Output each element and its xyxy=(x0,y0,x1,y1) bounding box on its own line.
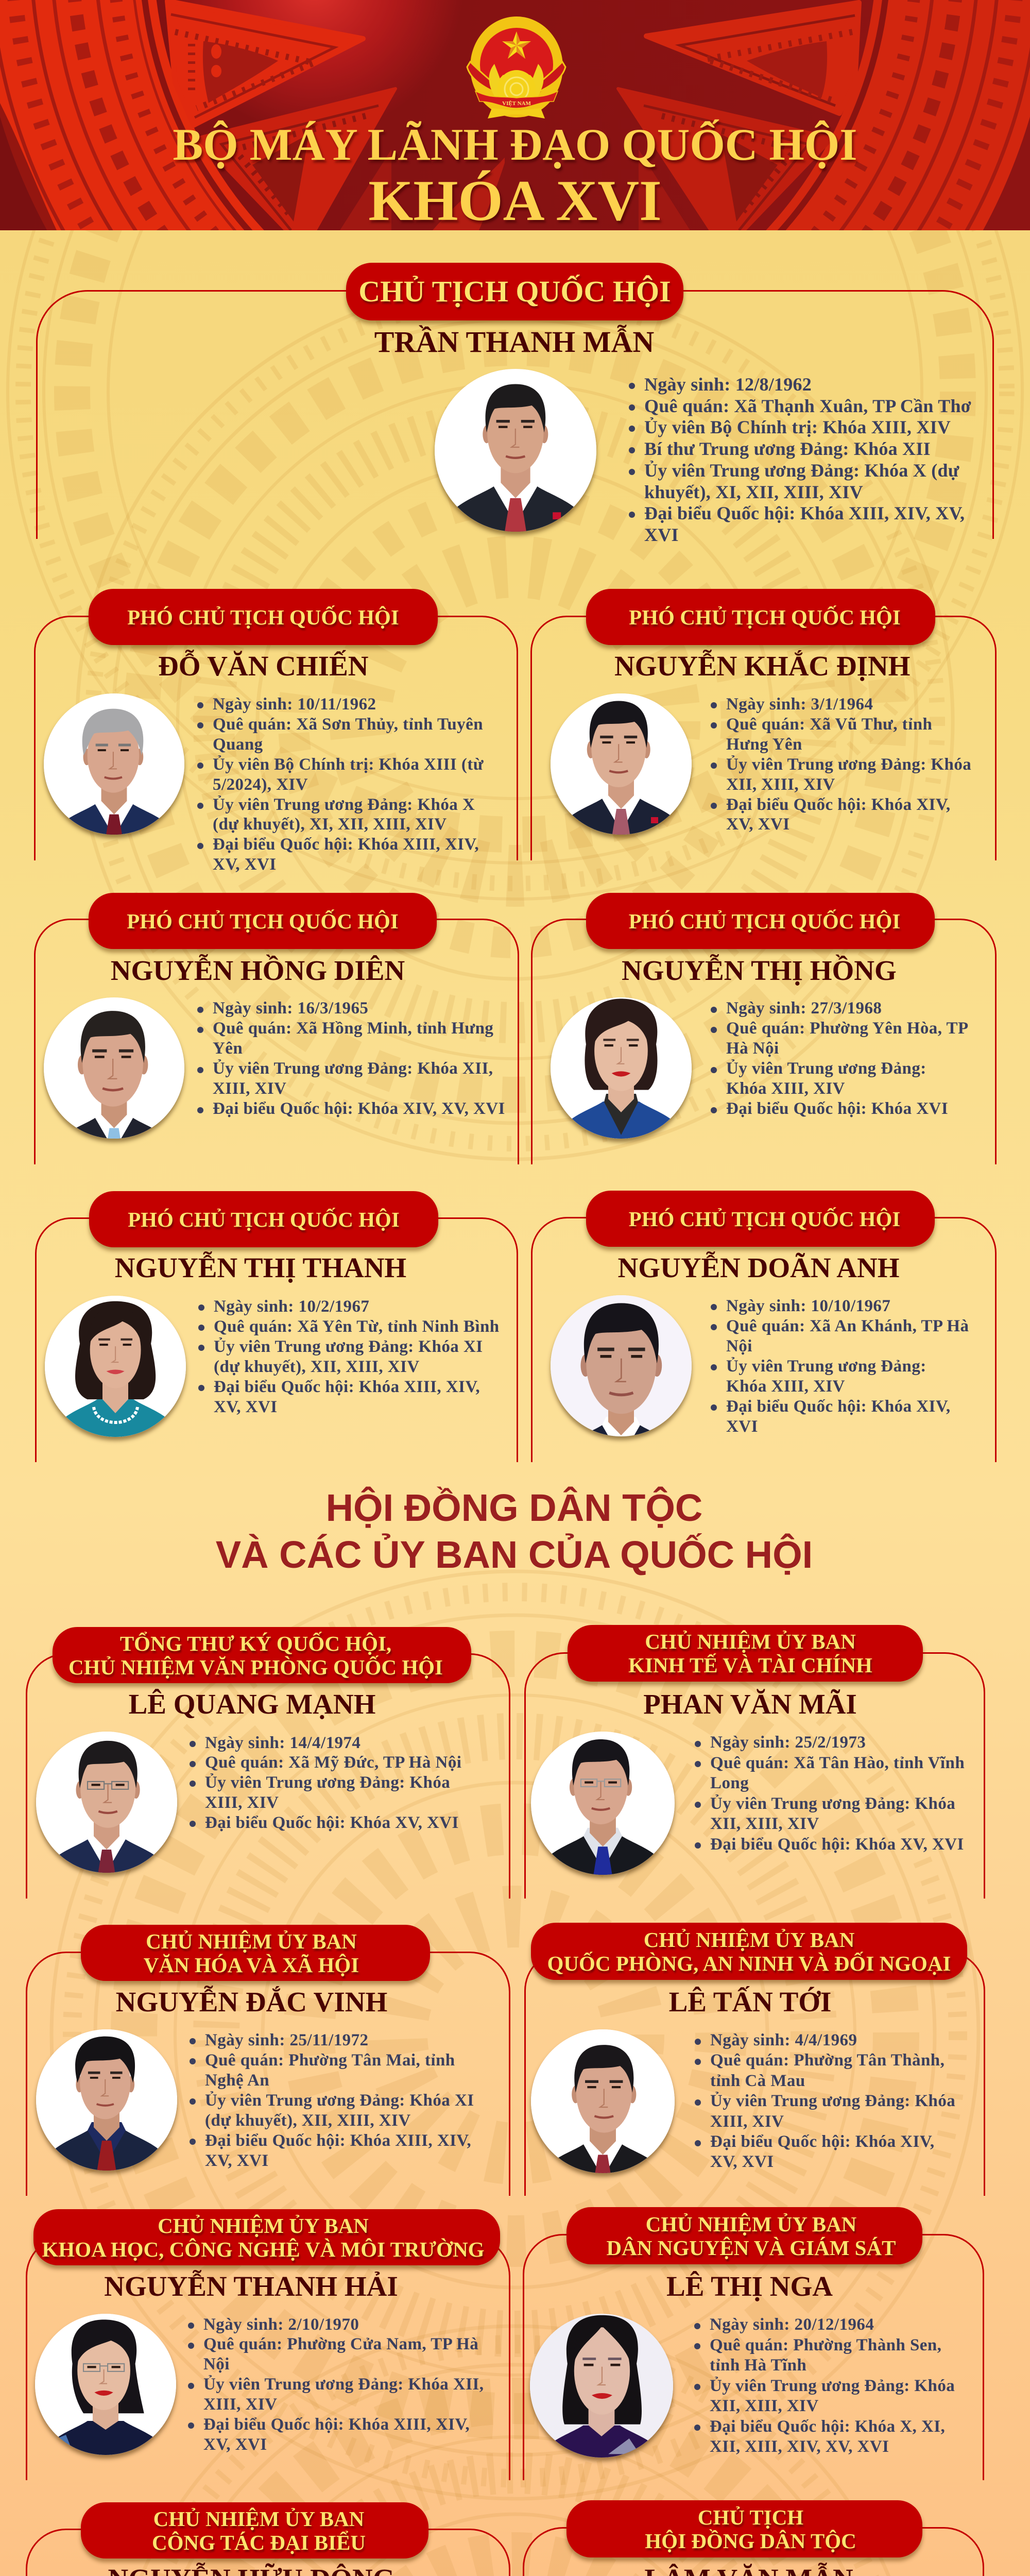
header banner xyxy=(0,0,1030,230)
name: TRẦN THANH MẪN xyxy=(374,325,654,359)
portrait xyxy=(531,1732,675,1875)
role badge xyxy=(53,1627,471,1683)
name: NGUYỄN KHẮC ĐỊNH xyxy=(614,650,910,682)
biography: XII, XIII, XIV, XV, XVI xyxy=(710,2437,889,2456)
biography: Quê quán: Phường Tân Thành, xyxy=(710,2051,945,2070)
role badge xyxy=(346,263,683,320)
biography: XIII, XIV xyxy=(203,2395,277,2414)
biography: Đại biểu Quốc hội: Khóa XV, XVI xyxy=(710,1835,964,1854)
role badge: CHỦ TỊCH QUỐC HỘI xyxy=(358,275,671,308)
biography: Nội xyxy=(203,2355,230,2374)
section heading xyxy=(162,1484,866,1578)
role badge: PHÓ CHỦ TỊCH QUỐC HỘI xyxy=(128,1208,400,1231)
biography: Đại biểu Quốc hội: Khóa XIV, xyxy=(726,1397,951,1416)
role badge xyxy=(568,1625,923,1682)
biography: Ủy viên Trung ương Đảng: Khóa xyxy=(710,2092,955,2110)
role badge: PHÓ CHỦ TỊCH QUỐC HỘI xyxy=(127,605,399,629)
biography: Ủy viên Trung ương Đảng: Khóa XII, xyxy=(203,2375,484,2394)
biography: Ngày sinh: 25/2/1973 xyxy=(710,1733,866,1752)
title xyxy=(173,120,858,230)
biography: Yên xyxy=(213,1039,243,1058)
role badge: CHỦ NHIỆM ỦY BAN xyxy=(644,1928,854,1952)
role badge xyxy=(566,2207,922,2264)
panel: Lê Thị Nga xyxy=(523,2207,984,2480)
name: LÊ THỊ NGA xyxy=(666,2270,833,2302)
role badge xyxy=(89,893,437,949)
biography: Nghệ An xyxy=(205,2071,269,2090)
portrait xyxy=(530,2314,673,2458)
biography xyxy=(711,1296,969,1436)
name: LÊ TẤN TỚI xyxy=(669,1986,831,2018)
role badge xyxy=(586,1191,935,1247)
portrait xyxy=(35,2314,176,2455)
biography xyxy=(198,1296,500,1417)
biography: XV, XVI xyxy=(203,2435,267,2454)
biography: Hưng Yên xyxy=(726,735,802,754)
portrait xyxy=(36,2029,177,2171)
role badge: CHỦ NHIỆM VĂN PHÒNG QUỐC HỘI xyxy=(68,1655,443,1679)
biography: Ủy viên Trung ương Đảng: Khóa xyxy=(710,1794,955,1812)
biography: Ngày sinh: 3/1/1964 xyxy=(726,695,873,714)
panel: Nguyễn Khắc Định xyxy=(530,589,997,860)
panel: Nguyễn Thanh Hải xyxy=(26,2209,510,2480)
biography: Đại biểu Quốc hội: Khóa XIII, XIV, xyxy=(205,2131,471,2149)
biography: Quê quán: Xã Thạnh Xuân, TP Cần Thơ xyxy=(644,396,971,416)
role badge: CHỦ NHIỆM ỦY BAN xyxy=(645,1630,856,1653)
biography: Quê quán: Phường Yên Hòa, TP xyxy=(726,1019,969,1038)
biography: XV, XVI xyxy=(214,1397,278,1416)
role badge: CHỦ NHIỆM ỦY BAN xyxy=(153,2507,364,2531)
portrait xyxy=(435,369,596,532)
role badge: CHỦ NHIỆM ỦY BAN xyxy=(146,1929,357,1953)
name: NGUYỄN ĐẮC VINH xyxy=(116,1986,387,2018)
biography: Đại biểu Quốc hội: Khóa XIV, xyxy=(710,2132,935,2151)
biography: Ngày sinh: 16/3/1965 xyxy=(213,999,368,1018)
role badge xyxy=(81,1925,430,1981)
role badge xyxy=(566,2500,922,2557)
biography: XII, XIII, XIV xyxy=(710,1815,819,1833)
role badge: PHÓ CHỦ TỊCH QUỐC HỘI xyxy=(629,1207,900,1230)
biography: 5/2024), XIV xyxy=(213,775,308,794)
name: NGUYỄN THỊ THANH xyxy=(115,1252,406,1283)
portrait xyxy=(531,2029,675,2173)
biography: Ủy viên Trung ương Đảng: Khóa xyxy=(726,755,971,774)
panel: Lê Quang Mạnh xyxy=(26,1627,510,1899)
biography: Quê quán: Xã An Khánh, TP Hà xyxy=(726,1317,969,1335)
role badge: HỘI ĐỒNG DÂN TỘC xyxy=(645,2529,856,2552)
biography: (dự khuyết), XII, XIII, XIV xyxy=(214,1357,420,1376)
role badge xyxy=(89,1191,438,1247)
biography: Ủy viên Trung ương Đảng: Khóa XI xyxy=(214,1337,483,1356)
biography: Quê quán: Xã Vũ Thư, tỉnh xyxy=(726,715,932,734)
biography: Ngày sinh: 4/4/1969 xyxy=(710,2031,857,2049)
biography: XIII, XIV xyxy=(205,1793,279,1812)
biography: (dự khuyết), XII, XIII, XIV xyxy=(205,2111,411,2130)
icon: national emblem of Vietnam xyxy=(466,16,566,118)
biography: Quê quán: Phường Tân Mai, tỉnh xyxy=(205,2050,455,2069)
biography: Hà Nội xyxy=(726,1039,779,1058)
biography: Ủy viên Trung ương Đảng: Khóa xyxy=(205,1773,450,1792)
biography: Ủy viên Bộ Chính trị: Khóa XIII (từ xyxy=(213,755,484,774)
role badge xyxy=(33,2209,500,2265)
biography xyxy=(190,1733,461,1833)
biography: XIII, XIV xyxy=(710,2112,784,2131)
biography: Quê quán: Xã Mỹ Đức, TP Hà Nội xyxy=(205,1753,461,1772)
biography: Ủy viên Trung ương Đảng: Khóa X (dự xyxy=(644,460,959,481)
biography xyxy=(629,374,971,545)
biography: Đại biểu Quốc hội: Khóa XV, XVI xyxy=(205,1814,459,1832)
panel: Nguyễn Đắc Vinh xyxy=(26,1925,510,2196)
biography: XII, XIII, XIV xyxy=(726,775,835,794)
biography: XVI xyxy=(644,524,679,545)
name: PHAN VĂN MÃI xyxy=(643,1688,857,1720)
biography: Ngày sinh: 25/11/1972 xyxy=(205,2031,369,2049)
biography: Ủy viên Trung ương Đảng: xyxy=(726,1357,926,1376)
biography: Quê quán: Xã Hồng Minh, tỉnh Hưng xyxy=(213,1019,493,1038)
biography: Ủy viên Trung ương Đảng: Khóa X xyxy=(213,795,475,814)
biography: Bí thư Trung ương Đảng: Khóa XII xyxy=(644,438,931,459)
name: NGUYỄN THANH HẢI xyxy=(104,2270,398,2302)
role badge: CÔNG TÁC ĐẠI BIỂU xyxy=(152,2531,366,2554)
role badge: PHÓ CHỦ TỊCH QUỐC HỘI xyxy=(629,909,900,933)
panel: Nguyễn Thị Thanh xyxy=(35,1191,518,1462)
biography: Khóa XIII, XIV xyxy=(726,1079,845,1098)
biography: Quang xyxy=(213,735,263,754)
biography: Ủy viên Trung ương Đảng: xyxy=(726,1059,926,1078)
biography: tỉnh Hà Tĩnh xyxy=(710,2356,806,2375)
biography: Ủy viên Trung ương Đảng: Khóa XII, xyxy=(213,1059,493,1078)
title: BỘ MÁY LÃNH ĐẠO QUỐC HỘI xyxy=(173,120,857,170)
biography: Ngày sinh: 14/4/1974 xyxy=(205,1733,360,1752)
biography xyxy=(695,1733,965,1855)
header background pattern xyxy=(0,0,1030,230)
portrait xyxy=(36,1732,177,1873)
biography: Quê quán: Xã Yên Từ, tỉnh Ninh Bình xyxy=(214,1317,500,1335)
biography xyxy=(190,2030,474,2171)
biography xyxy=(711,695,971,834)
biography: tỉnh Cà Mau xyxy=(710,2072,805,2090)
role badge: CHỦ NHIỆM ỦY BAN xyxy=(158,2213,369,2237)
biography: XV, XVI xyxy=(205,2151,269,2170)
portrait xyxy=(44,693,184,835)
biography: Ngày sinh: 10/11/1962 xyxy=(213,695,376,714)
section heading: VÀ CÁC ỦY BAN CỦA QUỐC HỘI xyxy=(216,1533,813,1576)
panel: Đỗ Văn Chiến xyxy=(34,589,518,874)
biography: XV, XVI xyxy=(213,855,277,874)
biography: Đại biểu Quốc hội: Khóa XVI xyxy=(726,1099,948,1118)
role badge: DÂN NGUYỆN VÀ GIÁM SÁT xyxy=(607,2236,896,2260)
biography xyxy=(188,2314,484,2455)
biography: Ngày sinh: 27/3/1968 xyxy=(726,999,882,1018)
role badge: TỔNG THƯ KÝ QUỐC HỘI, xyxy=(120,1631,391,1655)
biography xyxy=(197,695,484,874)
role badge: PHÓ CHỦ TỊCH QUỐC HỘI xyxy=(127,909,399,933)
biography: XIII, XIV xyxy=(213,1079,286,1098)
biography: Quê quán: Xã Sơn Thủy, tỉnh Tuyên xyxy=(213,715,483,734)
biography: Khóa XIII, XIV xyxy=(726,1377,845,1395)
biography: Đại biểu Quốc hội: Khóa XIV, XV, XVI xyxy=(213,1099,505,1118)
biography: Ngày sinh: 10/10/1967 xyxy=(726,1296,890,1315)
biography: Đại biểu Quốc hội: Khóa XIII, XIV, xyxy=(203,2415,470,2434)
name: NGUYỄN DOÃN ANH xyxy=(618,1252,899,1283)
biography: Đại biểu Quốc hội: Khóa XIII, XIV, XV, xyxy=(644,503,965,523)
biography: Đại biểu Quốc hội: Khóa XIV, xyxy=(726,795,951,814)
biography xyxy=(197,999,505,1118)
biography: Đại biểu Quốc hội: Khóa X, XI, xyxy=(710,2417,945,2436)
role badge xyxy=(586,893,935,949)
portrait xyxy=(44,997,184,1139)
biography: Ngày sinh: 12/8/1962 xyxy=(644,374,812,395)
biography: Ủy viên Trung ương Đảng: Khóa xyxy=(710,2376,955,2395)
role badge: KHOA HỌC, CÔNG NGHỆ VÀ MÔI TRƯỜNG xyxy=(42,2237,485,2261)
portrait xyxy=(551,693,692,835)
panel: Lê Tấn Tới xyxy=(524,1923,985,2196)
role badge: VĂN HÓA VÀ XÃ HỘI xyxy=(144,1953,359,1976)
icon: national emblem of Vietnam: VIỆT NAM xyxy=(502,100,531,107)
panel: Nguyễn Thị Hồng xyxy=(531,893,997,1164)
biography: Quê quán: Xã Tân Hào, tỉnh Vĩnh xyxy=(710,1754,965,1772)
panel: Nguyễn Hồng Diên xyxy=(34,893,519,1164)
biography: Ngày sinh: 2/10/1970 xyxy=(203,2315,359,2334)
biography xyxy=(695,2030,955,2173)
biography: Nội xyxy=(726,1336,752,1355)
section heading: HỘI ĐỒNG DÂN TỘC xyxy=(326,1486,702,1529)
biography: Đại biểu Quốc hội: Khóa XIII, XIV, xyxy=(214,1378,480,1396)
biography: Quê quán: Phường Cửa Nam, TP Hà xyxy=(203,2335,478,2353)
biography: Ủy viên Trung ương Đảng: Khóa XI xyxy=(205,2091,474,2109)
role badge: CHỦ NHIỆM ỦY BAN xyxy=(646,2212,856,2236)
biography: khuyết), XI, XII, XIII, XIV xyxy=(644,482,863,502)
role badge: PHÓ CHỦ TỊCH QUỐC HỘI xyxy=(629,605,901,629)
panel: Phan Văn Mãi xyxy=(524,1625,985,1899)
role badge: QUỐC PHÒNG, AN NINH VÀ ĐỐI NGOẠI xyxy=(547,1952,951,1975)
name: NGUYỄN THỊ HỒNG xyxy=(622,955,897,986)
biography: Ngày sinh: 20/12/1964 xyxy=(710,2315,874,2334)
role badge: KINH TẾ VÀ TÀI CHÍNH xyxy=(628,1653,872,1677)
biography: Quê quán: Phường Thành Sen, xyxy=(710,2336,941,2354)
name: ĐỖ VĂN CHIẾN xyxy=(158,650,368,682)
role badge xyxy=(89,589,438,645)
panel: Chủ tịch Quốc hội xyxy=(36,263,994,545)
role badge xyxy=(531,1923,967,1980)
role badge: CHỦ TỊCH xyxy=(698,2505,803,2529)
biography: Ngày sinh: 10/2/1967 xyxy=(214,1297,369,1316)
name: NGUYỄN HỒNG DIÊN xyxy=(111,955,405,986)
name: LÊ QUANG MẠNH xyxy=(129,1688,375,1720)
biography: XVI xyxy=(726,1417,758,1435)
biography xyxy=(711,998,969,1119)
panel: Nguyễn Doãn Anh xyxy=(531,1191,997,1462)
biography: XV, XVI xyxy=(726,815,790,834)
panel: Lâm Văn Mẫn xyxy=(523,2500,984,2576)
biography xyxy=(694,2315,955,2458)
biography: XII, XIII, XIV xyxy=(710,2397,819,2415)
biography: Ủy viên Bộ Chính trị: Khóa XIII, XIV xyxy=(644,417,951,437)
portrait xyxy=(45,1296,186,1437)
role badge xyxy=(586,589,935,645)
biography: (dự khuyết), XI, XII, XIII, XIV xyxy=(213,815,447,834)
portrait xyxy=(551,1295,692,1436)
role badge xyxy=(81,2502,428,2558)
biography: Long xyxy=(710,1774,749,1792)
biography: XV, XVI xyxy=(710,2153,774,2171)
portrait xyxy=(551,997,692,1139)
biography: Đại biểu Quốc hội: Khóa XIII, XIV, xyxy=(213,835,479,854)
panel: Nguyễn Hữu Đông xyxy=(26,2502,510,2576)
